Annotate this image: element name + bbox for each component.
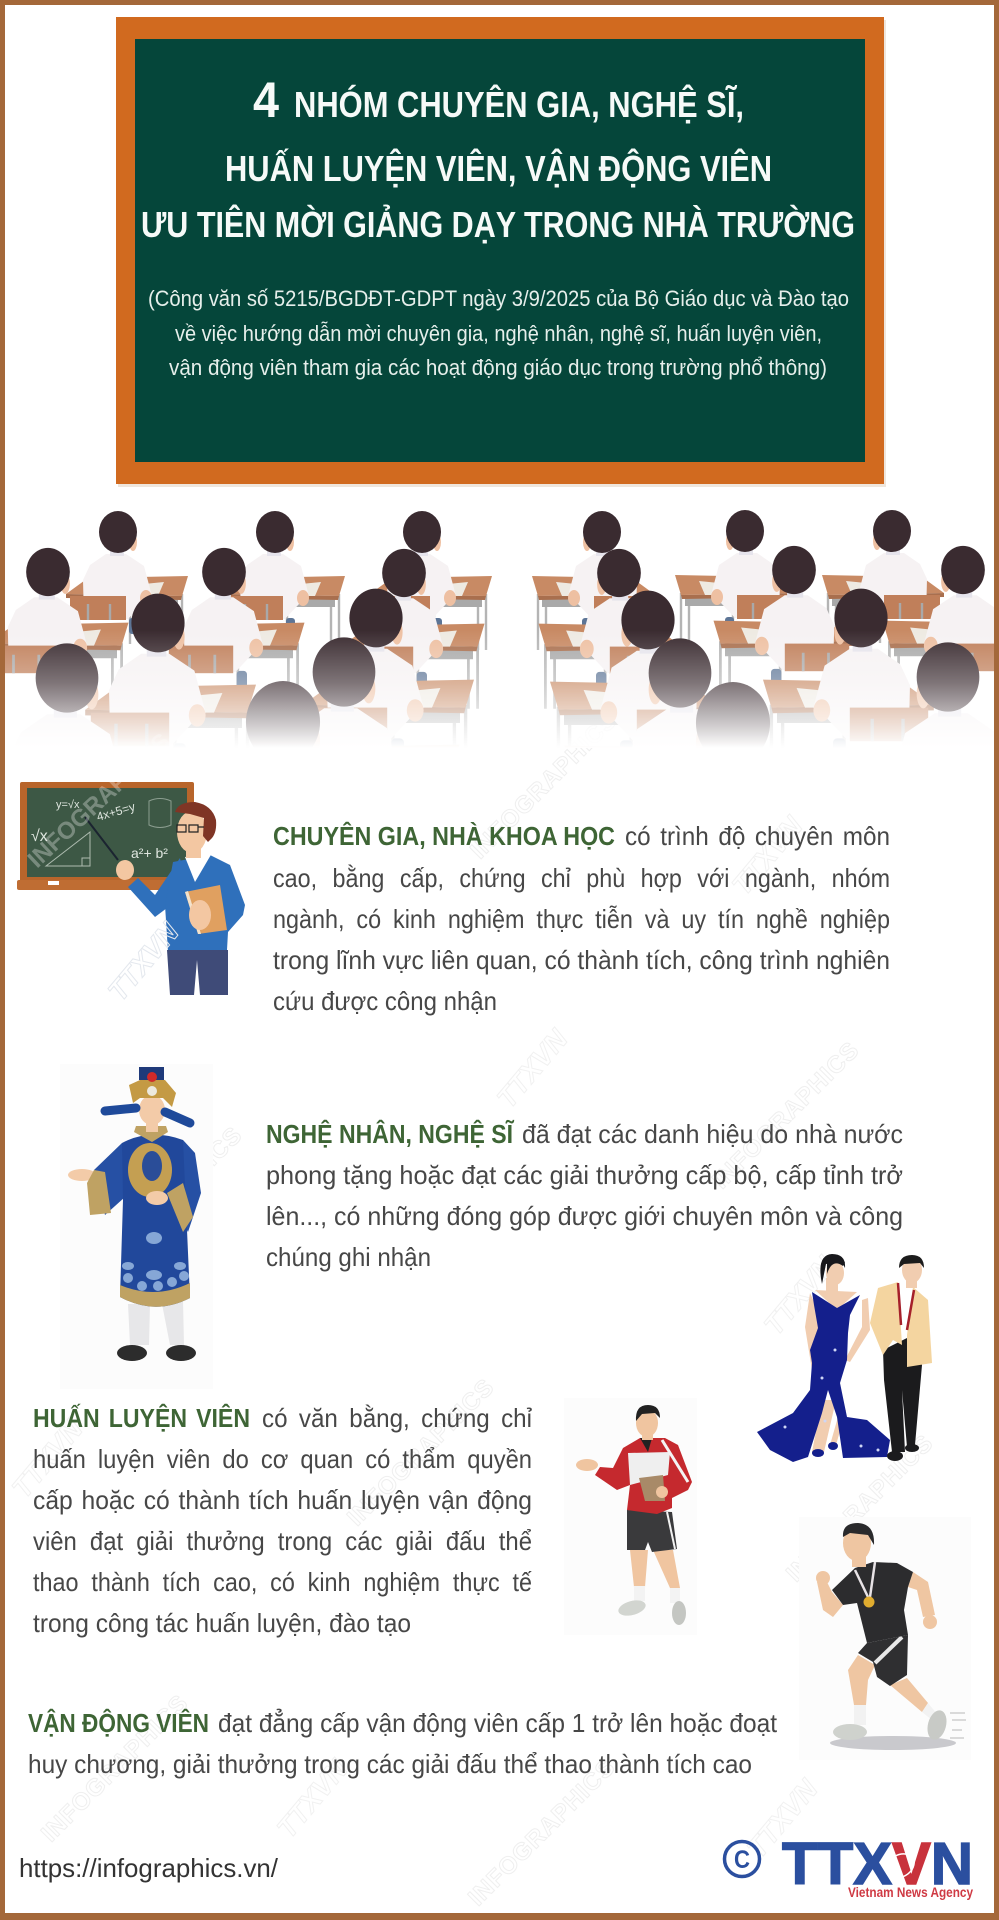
- text block: huấn luyện viên: huấn luyện viên do cơ quan có thẩm quyền: [33, 1444, 532, 1474]
- text block: vận động viên: VẬN ĐỘNG VIÊN: [28, 1708, 209, 1738]
- text block: huấn luyện viên: trong công tác huấn luyện, đào tạo: [33, 1608, 411, 1638]
- watermarks: TTXVN: [758, 1250, 841, 1341]
- text block: nghệ nhân, nghệ sĩ: chúng ghi nhận: [266, 1242, 431, 1272]
- subtitle: [148, 286, 849, 380]
- text block: huấn luyện viên: HUẤN LUYỆN VIÊN: [33, 1403, 250, 1433]
- illustration: runner with medal: [799, 1517, 971, 1760]
- text block: huấn luyện viên: [33, 1403, 532, 1638]
- text block: nghệ nhân, nghệ sĩ: phong tặng hoặc đạt các giải thưởng cấp bộ, cấp tỉnh trở: [266, 1160, 903, 1190]
- title: [141, 72, 855, 245]
- watermarks: INFOGRAPHICS: [465, 707, 623, 864]
- classroom students illustration: [5, 510, 994, 748]
- text block: huấn luyện viên: cấp hoặc có thành tích huấn luyện vận động: [33, 1485, 532, 1515]
- illustration: teacher at chalkboard: y=√x: [56, 799, 80, 811]
- illustration: teacher at chalkboard: a²+ b²: [131, 845, 168, 861]
- watermarks: INFOGRAPHICS: [781, 1430, 939, 1587]
- text block: chuyên gia, nhà khoa học: có trình độ chuyên môn: [625, 821, 890, 851]
- watermarks: INFOGRAPHICS: [463, 1754, 621, 1911]
- watermarks: TTXVN: [6, 1413, 89, 1504]
- text block: chuyên gia, nhà khoa học: cao, bằng cấp, chứng chỉ phù hợp với ngành, nhóm: [273, 863, 890, 893]
- illustration: teacher at chalkboard: √x: [31, 828, 48, 845]
- watermarks: TTXVN: [741, 1773, 824, 1864]
- text block: chuyên gia, nhà khoa học: CHUYÊN GIA, NHÀ KHOA HỌC: [273, 821, 615, 851]
- watermarks: TTXVN: [491, 1023, 574, 1114]
- illustration: teacher at chalkboard: 4x+5=y: [95, 800, 137, 824]
- text block: huấn luyện viên: có văn bằng, chứng chỉ: [262, 1403, 532, 1433]
- title: HUẤN LUYỆN VIÊN, VẬN ĐỘNG VIÊN: [225, 147, 772, 189]
- text block: chuyên gia, nhà khoa học: trong lĩnh vực liên quan, có thành tích, công trình nghiên: [273, 945, 890, 975]
- logo: TTXVN Vietnam News Agency: C: [734, 1846, 750, 1874]
- text block: nghệ nhân, nghệ sĩ: lên..., có những đóng góp được giới chuyên môn và công: [266, 1201, 903, 1231]
- source url: https://infographics.vn/: [19, 1853, 279, 1883]
- text block: vận động viên: huy chương, giải thưởng trong các giải đấu thể thao thành tích cao: [28, 1749, 752, 1779]
- subtitle: về việc hướng dẫn mời chuyên gia, nghệ nhân, nghệ sĩ, huấn luyện viên,: [175, 321, 822, 346]
- title: ƯU TIÊN MỜI GIẢNG DẠY TRONG NHÀ TRƯỜNG: [141, 203, 855, 245]
- watermarks: TTXVN: [271, 1753, 354, 1844]
- subtitle: (Công văn số 5215/BGDĐT-GDPT ngày 3/9/2025 của Bộ Giáo dục và Đào tạo: [148, 286, 849, 311]
- text block: chuyên gia, nhà khoa học: ngành, có kinh nghiệm thực tiễn và uy tín nghề nghiệp: [273, 904, 890, 934]
- text block: vận động viên: đạt đẳng cấp vận động viên cấp 1 trở lên hoặc đoạt: [218, 1707, 778, 1738]
- logo: TTXVN Vietnam News Agency: TTXVN: [782, 1831, 973, 1897]
- panel: chalkboard title board: [116, 17, 886, 487]
- logo: TTXVN Vietnam News Agency: Vietnam News Agency: [848, 1884, 973, 1900]
- text block: chuyên gia, nhà khoa học: [273, 821, 890, 1016]
- text block: nghệ nhân, nghệ sĩ: [266, 1119, 903, 1272]
- subtitle: vận động viên tham gia các hoạt động giáo dục trong trường phổ thông): [169, 355, 827, 380]
- illustration: teacher at chalkboard: TTXVN: [102, 916, 185, 1007]
- text block: nghệ nhân, nghệ sĩ: NGHỆ NHÂN, NGHỆ SĨ: [266, 1119, 515, 1149]
- text block: chuyên gia, nhà khoa học: cứu được công nhận: [273, 986, 497, 1016]
- illustration: artisan in royal robe: [60, 1064, 213, 1389]
- title: 4: [253, 72, 279, 128]
- watermarks: INFOGRAPHICS: [707, 1037, 865, 1194]
- text block: nghệ nhân, nghệ sĩ: đã đạt các danh hiệu do nhà nước: [522, 1119, 903, 1149]
- text block: huấn luyện viên: thao thành tích cao, có kinh nghiệm thực tế: [33, 1567, 532, 1597]
- title: NHÓM CHUYÊN GIA, NGHỆ SĨ,: [294, 83, 744, 125]
- illustration: artist couple: [757, 1254, 932, 1462]
- watermarks: INFOGRAPHICS: [90, 1122, 248, 1279]
- watermarks: [6, 707, 939, 1911]
- watermarks: INFOGRAPHICS: [342, 1374, 500, 1531]
- watermarks: INFOGRAPHICS: [36, 1690, 194, 1847]
- watermarks: TTXVN: [726, 810, 809, 901]
- text block: huấn luyện viên: viên đạt giải thưởng trong các giải đấu thể: [33, 1526, 532, 1556]
- illustration: teacher at chalkboard: [17, 728, 245, 1007]
- illustration: teacher at chalkboard: INFOGRAPHICS: [23, 728, 176, 873]
- text block: vận động viên: [28, 1707, 778, 1779]
- illustration: coach: [564, 1398, 697, 1635]
